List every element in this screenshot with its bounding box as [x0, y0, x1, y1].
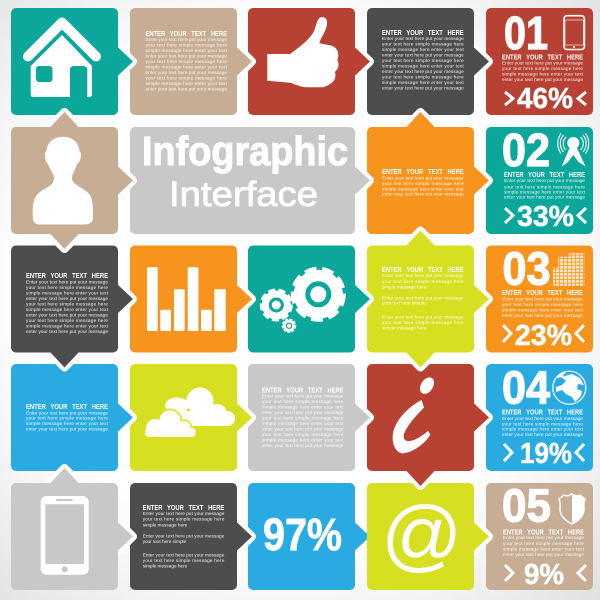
panel: dark text, row 1: enter your text here put your message: [382, 52, 464, 58]
panel: beige text, row 1: Enter your text here put your message: [146, 37, 227, 42]
value 23%: 23%: [515, 320, 572, 352]
panel: lime text with arrows: your text here simple message here: [382, 320, 464, 325]
panel: orange text with up arrow: ENTER YOUR TEXT HERE: [382, 167, 464, 176]
panel: 03 stat orange: [486, 242, 593, 352]
panel: dark text, row 1: simple message here enter your text: [382, 64, 464, 68]
panel: dark text, row 3: simple message here enter your text: [26, 307, 109, 312]
panel: dark text, row 5: Enter your text here put your message: [143, 534, 225, 539]
panel: red thumbs up: [248, 8, 370, 115]
panel: lime text with arrows: Enter your text here put your message: [382, 315, 464, 320]
icon: house: [28, 22, 96, 97]
panel: gray text, row 4: simple message here enter your text: [262, 438, 344, 443]
panel: 05 stat beige: Enter your text here put your message: [503, 535, 584, 540]
panel: blue text, row 4: your text here simple message here: [26, 416, 108, 421]
panel: teal gears: [248, 246, 370, 352]
panel: dark text, row 1: your text here simple message here: [382, 58, 464, 63]
panel: dark text, row 3: Enter your text here put your message: [26, 280, 108, 285]
panel: 02 stat teal: enter your text here put your message: [504, 195, 585, 200]
panel: dark text, row 1: simple message here enter your text: [382, 80, 464, 85]
panel: dark text, row 3: simple message here enter your text: [26, 323, 109, 328]
panel: 05 stat beige: enter your text here put your message: [503, 552, 584, 557]
panel: gray smartphone: [11, 468, 133, 590]
panel: gray text, row 4: your text here simple message here: [262, 432, 344, 437]
panel: 01 stat red: enter your text here put your message: [502, 77, 583, 82]
title line 1: Infographic: [142, 128, 348, 174]
panel: blue text, row 4: Enter your text here put your message: [26, 410, 108, 415]
icon: shield: [559, 494, 585, 524]
number 03: 03: [502, 242, 550, 294]
panel: 02 stat teal: [486, 124, 593, 234]
number 04: 04: [502, 362, 550, 414]
panel: dark text, row 1: Enter your text here put your message: [382, 36, 464, 41]
panel: beige person: [11, 112, 133, 249]
number 01: 01: [504, 7, 548, 59]
panel: 03 stat orange: simple message here enter your text: [502, 308, 584, 313]
panel: red info: [367, 364, 489, 486]
value 97%: 97%: [263, 509, 342, 560]
chevron right: [578, 208, 586, 223]
icon: large gear: [293, 269, 344, 320]
bar chart: [147, 267, 226, 331]
chevron left: [505, 208, 513, 223]
value 9%: 9%: [524, 559, 564, 591]
panel: dark text, row 3: [11, 246, 133, 368]
panel: beige text, row 1: simple message here enter your text: [146, 48, 228, 53]
panel: dark text, row 5: your text here simple message here: [143, 558, 225, 563]
panel: dark text, row 3: your text here simple message here: [26, 285, 108, 290]
chevron left: [505, 565, 513, 581]
panel: lime text with arrows: Enter your text here put your message: [382, 273, 464, 278]
panel: blue text, row 4: [11, 364, 133, 471]
number 02: 02: [502, 124, 550, 176]
panel: dark text, row 5: [130, 483, 252, 590]
panel: gray text, row 4: enter your text here put your message: [262, 427, 344, 432]
panel: dark text, row 1: your text here simple message here: [382, 42, 464, 46]
icon: smartphone: [41, 496, 89, 575]
panel: 01 stat red: your text here simple message here: [502, 66, 583, 71]
panel: 05 stat beige: simple message here enter your text: [503, 547, 585, 552]
panel: lime text with arrows: ENTER YOUR TEXT HERE: [382, 265, 464, 274]
panel: gray text, row 4: your text here simple message here: [262, 399, 344, 404]
panel: gray text, row 4: enter your text here put your message: [262, 410, 344, 415]
panel: 01 stat red: [486, 7, 593, 115]
icon: at sign: @: [380, 490, 461, 579]
panel: 03 stat orange: Enter your text here put your message: [502, 296, 583, 301]
panel: beige text, row 1: your text here simple message here: [146, 42, 227, 48]
icon: radio tower: [558, 134, 589, 166]
panel: dark text, row 1: your text here simple message here: [382, 74, 464, 80]
panel: 04 stat blue: simple message here enter your text: [502, 427, 584, 432]
panel: lime text with arrows: [367, 230, 489, 368]
panel: lime text with arrows: Enter your text here put your message: [382, 295, 464, 300]
panel: dark text, row 3: simple message here enter your text: [26, 291, 109, 296]
panel: orange bar chart: [130, 246, 252, 352]
panel: beige text, row 1: [130, 8, 252, 115]
panel: 04 stat blue: Enter your text here put your message: [502, 416, 583, 421]
panel: dark text, row 1: enter your text here put your message: [382, 69, 464, 74]
panel: dark text, row 1: simple message here enter your text: [382, 47, 464, 52]
icon: small gear: [282, 319, 296, 332]
panel: blue text, row 4: enter your text here put your message: [26, 427, 108, 432]
value 19%: 19%: [520, 438, 572, 470]
panel: gray text, row 4: your text here simple message here: [262, 416, 344, 421]
panel: 04 stat blue: [486, 362, 593, 471]
title line 2: Interface: [169, 175, 318, 214]
panel: gray text, row 4: simple message here enter your text: [262, 405, 344, 410]
chevron right: [576, 444, 584, 461]
panel: dark text, row 5: your text here simple: [143, 539, 187, 544]
icon: medium gear: [261, 290, 292, 320]
panel: dark text, row 5: your text here simple message here: [143, 517, 225, 522]
panel: beige text, row 1: ENTER YOUR TEXT HERE: [146, 29, 227, 38]
panel: 01 stat red: simple message here enter your text: [502, 72, 584, 77]
panel: title: [130, 127, 370, 234]
icon: large cloud: [165, 388, 235, 426]
panel: lime at sign: [367, 483, 489, 590]
panel: dark text, row 5: ENTER YOUR TEXT HERE: [143, 503, 224, 512]
chevron right: [576, 325, 584, 342]
chevron left: [503, 325, 511, 342]
panel: beige text, row 1: enter your text here put your message: [146, 54, 227, 58]
icon: small cloud: [145, 410, 196, 437]
panel: lime text with arrows: your text here simple: [382, 301, 426, 306]
panel: dark text, row 1: [367, 8, 489, 115]
panel: gray text, row 4: simple message here enter your text: [262, 421, 344, 426]
panel: beige text, row 1: simple message here enter your text: [146, 81, 228, 86]
panel: orange text with up arrow: simple message here enter your text: [382, 186, 464, 191]
panel: beige text, row 1: simple message here enter your text: [146, 64, 228, 70]
icon: italic i: [393, 375, 437, 453]
panel: gray text, row 4: ENTER YOUR TEXT HERE: [262, 386, 344, 394]
panel: gray text, row 4: [248, 364, 370, 471]
panel: dark text, row 3: your text here simple message here: [26, 318, 108, 323]
panel: orange text with up arrow: your text here simple message here: [382, 181, 464, 186]
panel: dark text, row 3: enter your text here put your message: [26, 296, 108, 301]
chevron right: [578, 92, 586, 105]
icon: buildings: [553, 253, 584, 286]
icon: globe: [553, 371, 586, 404]
panel: lime text with arrows: your text here simple message here: [382, 279, 464, 284]
value 46%: 46%: [517, 83, 573, 115]
panel: dark text, row 3: enter your text here put your message: [26, 312, 108, 317]
chevron right: [578, 565, 586, 581]
panel: beige text, row 1: your text here simple message here: [146, 59, 227, 64]
panel: dark text, row 3: your text here simple message here: [26, 302, 108, 306]
panel: blue text, row 4: simple message here enter your text: [26, 421, 109, 426]
chevron left: [504, 444, 512, 461]
panel: 04 stat blue: your text here simple message here: [502, 421, 583, 426]
panel: lime text with arrows: simple message here: [382, 326, 427, 331]
panel: beige text, row 1: enter your text here put your message: [146, 86, 227, 92]
panel: 01 stat red: Enter your text here put your message: [502, 60, 583, 65]
panel: dark text, row 1: enter your text here put your message: [382, 86, 464, 90]
panel: dark text, row 5: Enter your text here put your message: [143, 511, 225, 516]
panel: beige text, row 1: your text here simple message here: [146, 76, 227, 80]
panel: orange text with up arrow: [367, 112, 489, 234]
panel: orange text with up arrow: enter your text here put your message: [382, 192, 464, 197]
panel: 04 stat blue: enter your text here put your message: [502, 432, 583, 437]
panel: dark text, row 1: ENTER YOUR TEXT HERE: [382, 28, 464, 37]
panel: 03 stat orange: your text here simple message here: [502, 302, 583, 307]
chevron left: [505, 92, 513, 105]
panel: dark text, row 3: enter your text here put your message: [26, 329, 108, 334]
panel: blue text, row 4: ENTER YOUR TEXT HERE: [26, 402, 108, 411]
icon: person: [33, 137, 93, 224]
panel: dark text, row 5: simple message here: [143, 564, 188, 569]
panel: dark text, row 5: simple message here: [143, 522, 188, 527]
panel: 02 stat teal: your text here simple message here: [504, 184, 585, 189]
panel: lime text with arrows: simple message here: [382, 284, 427, 289]
panel: orange text with up arrow: Enter your text here put your message: [382, 176, 464, 181]
panel: 02 stat teal: Enter your text here put your message: [504, 178, 585, 183]
value 33%: 33%: [517, 201, 574, 233]
number 05: 05: [502, 480, 551, 532]
panel: blue 97%: [248, 483, 370, 590]
panel: lime clouds: [130, 364, 252, 471]
icon: thumbs up: [267, 17, 339, 87]
panel: dark text, row 3: ENTER YOUR TEXT HERE: [26, 271, 108, 280]
panel: teal home: [11, 8, 133, 115]
panel: gray text, row 4: enter your text here put your message: [262, 443, 344, 448]
panel: dark text, row 5: Enter your text here put your message: [143, 553, 225, 558]
panel: gray text, row 4: Enter your text here put your message: [262, 394, 344, 399]
panel: 05 stat beige: your text here simple message here: [503, 541, 584, 546]
panel: 02 stat teal: simple message here enter your text: [504, 190, 586, 195]
panel: beige text, row 1: enter your text here put your message: [146, 70, 227, 75]
panel: 05 stat beige: [486, 480, 593, 591]
icon: smartphone: [564, 16, 584, 49]
panel: 03 stat orange: enter your text here put your message: [502, 313, 583, 318]
